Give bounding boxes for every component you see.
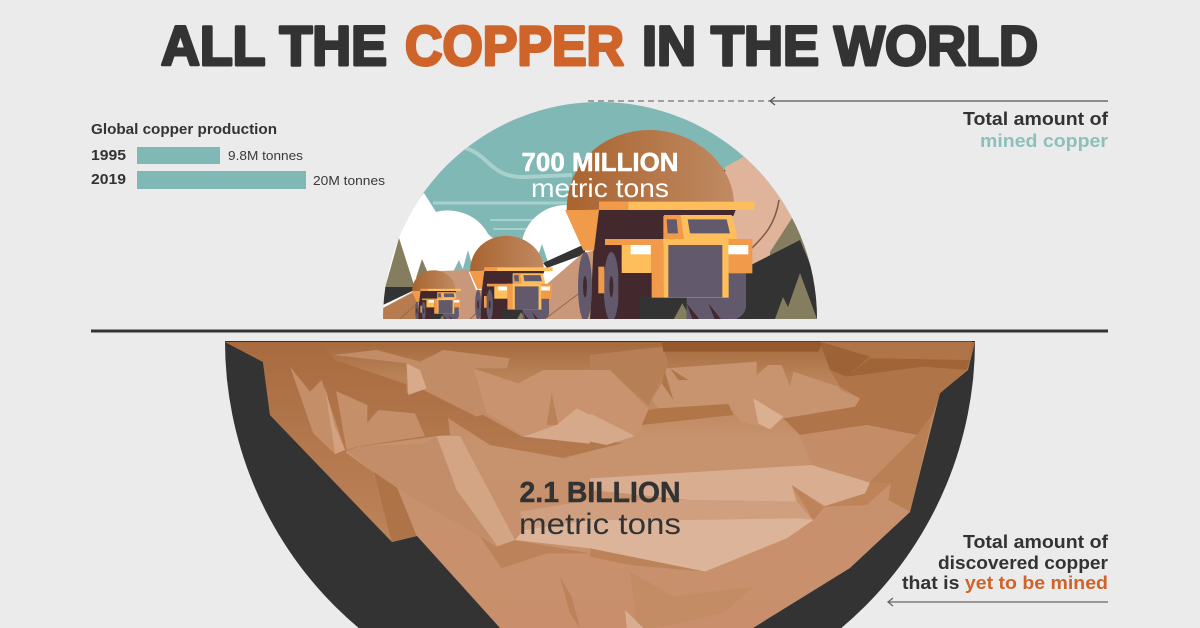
discovered copper label bbox=[902, 531, 1109, 593]
right dark ground bbox=[663, 240, 817, 319]
2019 year label: 2019 bbox=[91, 172, 126, 188]
hill crack lines bbox=[718, 170, 779, 250]
ground cracks bbox=[400, 294, 578, 319]
mined copper semicircle illustration bbox=[383, 102, 830, 322]
mined copper label: mined copper bbox=[980, 130, 1108, 151]
mined copper label bbox=[963, 108, 1109, 151]
top pointer arrow bbox=[588, 97, 1108, 105]
small truck bbox=[412, 270, 461, 320]
mined copper label: Total amount of bbox=[963, 108, 1109, 129]
1995 bar bbox=[137, 147, 220, 164]
title: IN THE WORLD bbox=[642, 14, 1038, 77]
2.1 billion figure bbox=[519, 477, 681, 541]
ground divider bbox=[91, 330, 1108, 332]
small teal trees bbox=[453, 244, 548, 272]
large truck bbox=[565, 130, 754, 322]
700 million figure: metric tons bbox=[531, 173, 669, 203]
2019 value: 20M tonnes bbox=[313, 174, 385, 188]
1995 value: 9.8M tonnes bbox=[228, 149, 303, 163]
2.1 billion figure: metric tons bbox=[519, 508, 681, 541]
title: ALL THE bbox=[161, 14, 387, 77]
discovered copper label: Total amount of bbox=[963, 531, 1109, 552]
medium truck bbox=[469, 236, 553, 320]
2019 bar bbox=[137, 171, 306, 189]
left dark slope bbox=[384, 287, 412, 305]
title bbox=[161, 14, 1038, 77]
title: COPPER bbox=[405, 14, 624, 77]
bar chart: global copper production bbox=[91, 122, 385, 189]
dark rock bowl bbox=[225, 341, 975, 628]
2.1 billion figure: 2.1 BILLION bbox=[520, 477, 680, 509]
copper ore body bbox=[225, 342, 975, 628]
discovered copper label: discovered copper bbox=[938, 552, 1108, 573]
discovered copper label: that is yet to be mined bbox=[902, 572, 1108, 593]
right tan hillside bbox=[725, 156, 816, 300]
right ore facets bbox=[590, 342, 972, 628]
chart heading: Global copper production bbox=[91, 122, 277, 138]
clouds bbox=[383, 193, 594, 310]
mid dark slope bbox=[543, 244, 585, 268]
right trees bbox=[775, 273, 817, 319]
left olive trees bbox=[385, 238, 430, 288]
right olive mountain bbox=[770, 218, 817, 280]
discovered copper bowl bbox=[225, 341, 975, 628]
left shoulder and ridge bbox=[225, 342, 623, 542]
bottom pointer arrow bbox=[888, 598, 1108, 606]
ground bbox=[383, 250, 594, 319]
left ore facets bbox=[290, 350, 590, 628]
sky streaks bbox=[433, 148, 572, 229]
700 million figure bbox=[522, 149, 678, 203]
1995 year label: 1995 bbox=[91, 148, 126, 164]
sky bbox=[383, 102, 817, 319]
700 million figure: 700 MILLION bbox=[522, 149, 678, 177]
